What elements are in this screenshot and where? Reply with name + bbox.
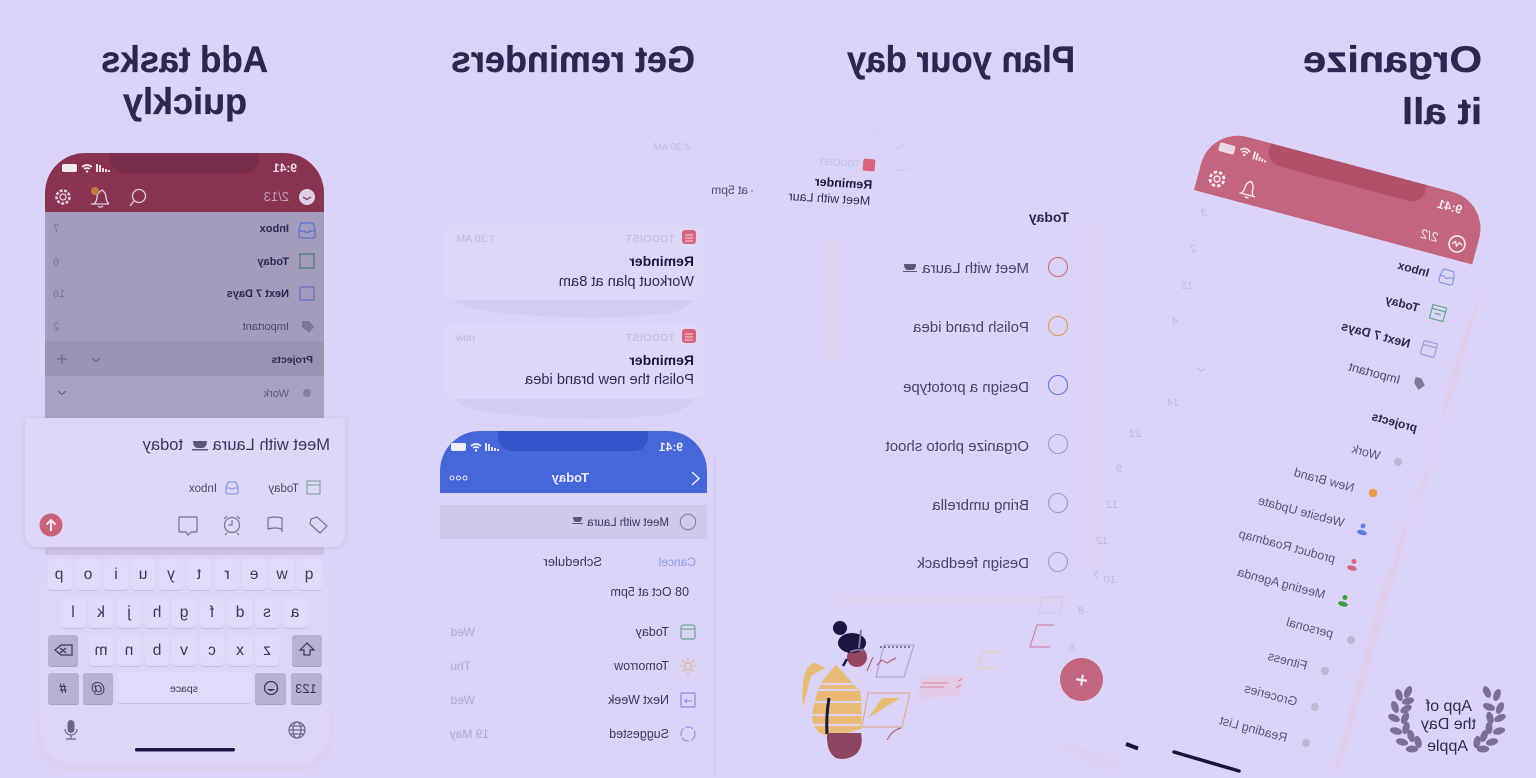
project dots	[1302, 458, 1402, 747]
right phone sidebar list: Groceries	[1243, 681, 1299, 709]
sidebar list: 16	[53, 288, 65, 300]
notification card: workout: Reminder	[629, 253, 694, 269]
sidebar list: Projects	[271, 354, 313, 366]
send button	[40, 514, 62, 536]
task list: Design a prototype	[903, 379, 1029, 396]
notification card: polish idea: Polish the new brand idea	[524, 372, 694, 388]
selected task row	[440, 505, 707, 539]
badge: app of the day: the Day	[1421, 716, 1476, 733]
task list: Bring umbrella	[932, 497, 1029, 514]
sidebar list: Inbox	[259, 223, 289, 235]
keyboard: u	[139, 566, 147, 583]
quick add popup	[25, 418, 345, 547]
scheduler sheet: 08 Oct at 5pm	[610, 585, 689, 599]
progress count	[264, 189, 315, 205]
keyboard: x	[236, 642, 244, 659]
right phone sidebar list	[1068, 207, 1456, 747]
right phone sidebar list: personal	[1285, 615, 1335, 641]
faint counts: 4	[1172, 315, 1178, 327]
faint counts: 12	[1096, 535, 1108, 547]
heading: plan your day: Plan your day	[847, 39, 1075, 80]
scheduler sheet: 19 May	[450, 727, 489, 741]
icon: coffee	[192, 441, 208, 450]
notification card: workout: TODOIST	[625, 233, 675, 245]
heading: organize it all	[1303, 39, 1482, 132]
phone corner shadow	[1058, 742, 1122, 772]
faint counts: 14	[1167, 397, 1179, 409]
progress count: 2/13	[264, 189, 289, 204]
heading: organize it all: it all	[1402, 91, 1482, 132]
tilted notification: TODOIST	[818, 156, 860, 170]
status bar	[451, 440, 683, 454]
right phone status and icons	[1208, 142, 1467, 254]
sidebar list	[53, 223, 315, 400]
phone: sidebar header	[1194, 127, 1489, 265]
panel: add tasks quickly	[25, 39, 345, 772]
keyboard: i	[114, 566, 118, 583]
nav bar: Today	[551, 470, 589, 485]
keyboard: v	[180, 642, 188, 659]
keyboard: #	[59, 680, 67, 696]
notification dot	[91, 187, 99, 195]
right phone sidebar list: Website Update	[1256, 493, 1346, 530]
right phone sidebar list: Today	[1384, 292, 1421, 315]
heading: add tasks quickly: Add tasks	[101, 39, 268, 80]
sidebar list: Next 7 Days	[227, 288, 289, 300]
heading: get reminders: Get reminders	[451, 39, 695, 80]
right phone sidebar list: Work	[1350, 442, 1382, 463]
heading: add tasks quickly	[101, 39, 268, 122]
scheduler sheet: Scheduler	[543, 554, 602, 569]
faint counts: 8	[1077, 605, 1084, 617]
keyboard: 123	[295, 681, 317, 696]
notification card: workout	[443, 225, 704, 318]
faint counts: 3	[1200, 207, 1207, 219]
keyboard: f	[209, 604, 214, 621]
right phone sidebar list: product Roadmap	[1237, 527, 1337, 566]
notification card: polish idea: now	[455, 332, 475, 344]
badge: app of the day: App of	[1425, 698, 1472, 715]
right phone sidebar list: New Brand	[1292, 465, 1356, 495]
sidebar list: 2	[53, 321, 59, 333]
scheduler sheet: Thu	[450, 659, 471, 673]
faint counts: 2	[1190, 243, 1197, 255]
list icons	[1438, 268, 1456, 286]
illustration: woman planning	[802, 597, 1063, 759]
tilted notification: Meet with Laur	[788, 189, 871, 208]
faint counts: 15	[1180, 280, 1193, 292]
panel: get reminders	[440, 39, 753, 775]
scheduler sheet: Suggested	[609, 727, 669, 741]
keyboard: a	[290, 604, 299, 621]
scheduler sheet: Today	[635, 625, 669, 639]
keyboard: z	[263, 642, 271, 659]
right phone status and icons: 2/2	[1419, 226, 1440, 245]
right phone sidebar list: Fitness	[1266, 649, 1309, 673]
notification card: workout: 7:30 AM	[456, 233, 495, 245]
quick add popup: Today	[268, 483, 299, 495]
heading: organize it all: Organize	[1303, 39, 1482, 80]
status bar: 9:41	[659, 440, 683, 454]
keyboard: p	[55, 566, 63, 583]
faint counts: 6	[1068, 642, 1075, 654]
keyboard: s	[263, 604, 271, 621]
tilted notification	[788, 130, 909, 208]
keyboard: k	[97, 604, 105, 621]
sidebar list: 7	[53, 223, 59, 235]
notification card: polish idea: TODOIST	[625, 332, 675, 344]
keyboard: space	[170, 683, 198, 695]
right phone sidebar list: Reading List	[1218, 713, 1289, 745]
keyboard: l	[71, 604, 75, 621]
scheduler sheet: Tomorrow	[613, 659, 669, 673]
faint counts: 21	[1129, 428, 1142, 440]
phone: quick add	[25, 153, 345, 772]
scheduler sheet: Wed	[451, 693, 475, 707]
right phone sidebar list: Next 7 Days	[1340, 319, 1412, 351]
task list: Organize photo shoot	[885, 438, 1029, 455]
selected task row: Meet with Laura	[587, 517, 669, 529]
home indicator	[1174, 752, 1239, 771]
home indicator fragment	[1126, 744, 1138, 748]
scheduler sheet: Cancel	[659, 555, 696, 569]
badge: app of the day	[1387, 685, 1507, 755]
keyboard: h	[153, 604, 161, 621]
background notification fragments	[653, 142, 753, 197]
keyboard: @	[90, 680, 106, 697]
heading: add tasks quickly: quickly	[123, 81, 247, 122]
scheduler sheet	[450, 554, 696, 741]
right phone sidebar list: Inbox	[1396, 258, 1431, 280]
keyboard: t	[196, 566, 201, 583]
notification card: polish idea: Reminder	[629, 352, 694, 368]
keyboard: m	[95, 642, 107, 659]
keyboard: g	[180, 604, 188, 621]
keyboard: d	[236, 604, 244, 621]
faint counts: 9	[1116, 463, 1122, 475]
keyboard: y	[167, 566, 175, 583]
notification card: polish idea	[443, 324, 704, 419]
phone shadow edges	[827, 220, 1091, 603]
keyboard: c	[208, 642, 216, 659]
keyboard: e	[250, 566, 258, 583]
right phone sidebar list: projects	[1370, 409, 1419, 435]
scheduler sheet: Wed	[451, 625, 475, 639]
header icons	[56, 190, 146, 207]
keyboard: b	[153, 642, 161, 659]
quick add popup: Meet with Laura	[212, 436, 330, 454]
status bar: 9:41	[273, 161, 297, 175]
add button	[1060, 658, 1103, 701]
task list	[885, 209, 1069, 572]
faint counts: 12	[1106, 499, 1118, 511]
tilted notification: Reminder	[814, 175, 873, 192]
sidebar list: 6	[53, 256, 59, 268]
panel: plan your day	[788, 39, 1138, 772]
sidebar list: Work	[263, 388, 289, 400]
keyboard: o	[84, 566, 92, 583]
background notification fragments: 4:30 AM	[653, 142, 690, 153]
faint counts: 10	[1103, 574, 1116, 586]
background notification fragments: at 5pm	[711, 183, 748, 197]
task list: Design feedback	[917, 555, 1029, 572]
nav bar	[450, 470, 699, 485]
task list: Polish brand idea	[912, 319, 1029, 336]
keyboard: q	[305, 566, 313, 583]
right phone sidebar list: Important	[1347, 360, 1402, 387]
badge: app of the day: Apple	[1427, 738, 1468, 755]
keyboard: w	[276, 566, 289, 583]
notification card: workout: Workout plan at 8am	[559, 274, 694, 290]
pink phone edge	[1334, 285, 1484, 770]
right phone status and icons: 9:41	[1436, 197, 1464, 217]
panel: organize it all	[1068, 39, 1507, 771]
quick add popup: today	[142, 436, 183, 454]
action icons	[179, 516, 327, 535]
faint counts	[1068, 207, 1207, 654]
status bar	[62, 161, 297, 175]
right phone sidebar list: Meeting Agenda	[1236, 565, 1327, 602]
sidebar list: Today	[257, 256, 289, 268]
scheduler sheet: Next Week	[607, 693, 669, 707]
quick add popup: Inbox	[189, 483, 217, 495]
task list: Today	[1029, 209, 1069, 225]
sidebar list: Important	[243, 321, 289, 333]
keyboard: n	[125, 642, 133, 659]
phone: scheduler	[440, 431, 716, 775]
task list: Meet with Laura	[922, 260, 1029, 277]
keyboard: r	[224, 566, 230, 583]
keyboard	[45, 547, 324, 752]
keyboard: j	[127, 604, 132, 621]
